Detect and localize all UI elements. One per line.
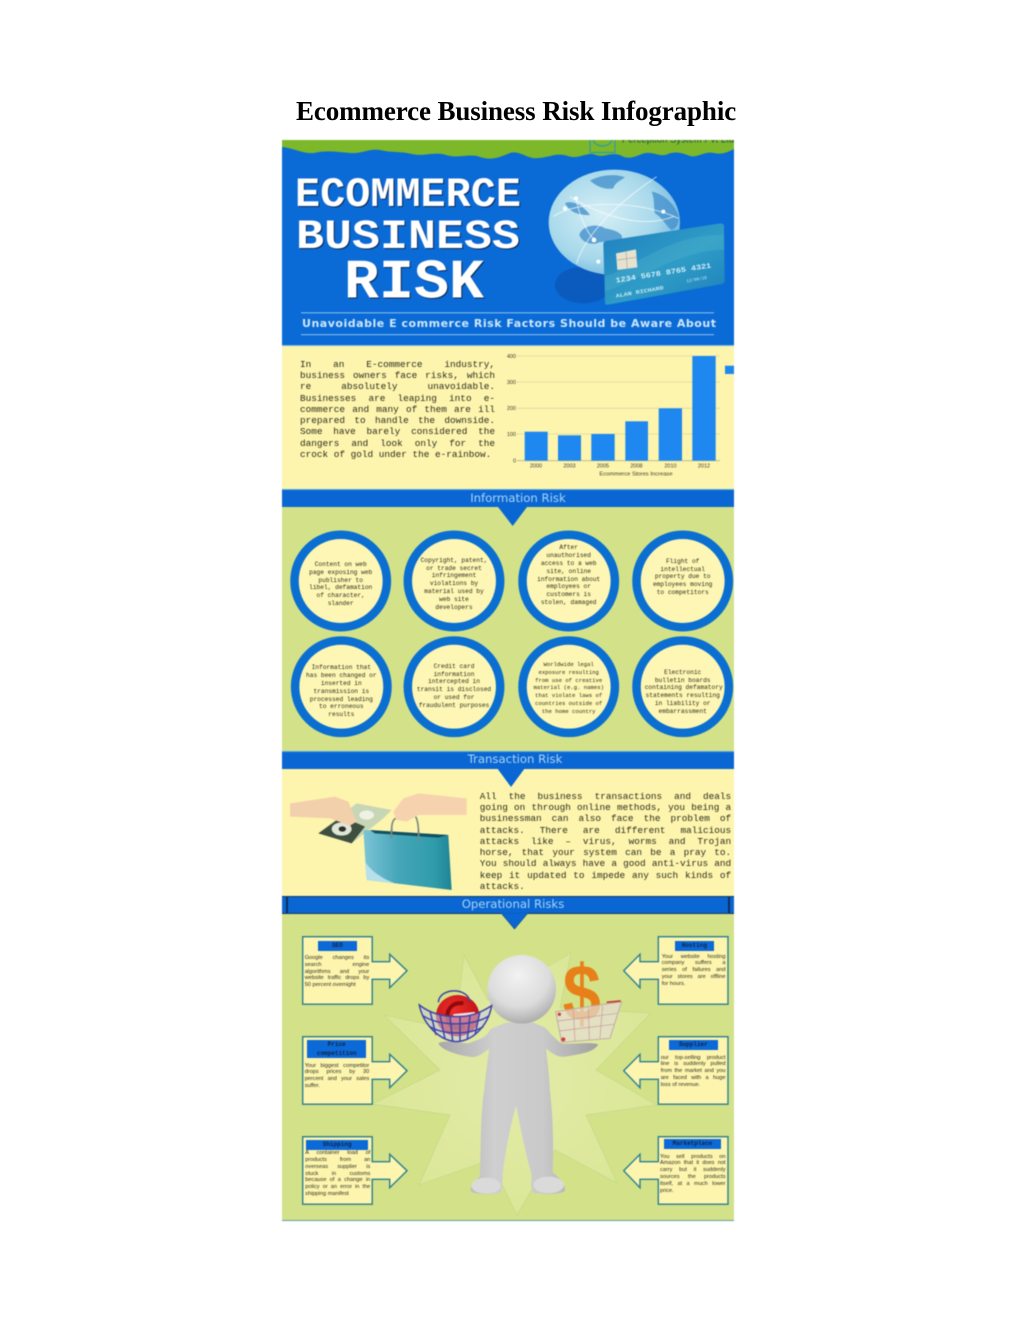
transaction text: attacks. There are different malicious [480, 825, 731, 836]
circle text 8: containing defamatory [645, 684, 723, 691]
panel: operational risks [282, 896, 734, 1221]
bar chart: 300 [507, 380, 516, 386]
intro text [300, 359, 495, 460]
callout: hosting: your stores are offline [662, 974, 725, 980]
panel: header banner [281, 139, 735, 346]
icon: envelope logo [590, 140, 615, 152]
circle text 2: infringement [432, 572, 476, 579]
bar end caps [285, 896, 731, 914]
callout: shipping: policy or an error in the [305, 1184, 370, 1190]
callout: supplier: Supplier [679, 1041, 708, 1048]
circle text 5: has been changed or [306, 672, 377, 679]
callout: price competition: competition [317, 1050, 356, 1057]
panel: information risk [282, 489, 734, 751]
icon: credit card: ALAN RICHARD [615, 285, 664, 300]
circle text 5: to erroneous [319, 703, 364, 710]
circle text 5: transmission is [313, 688, 369, 695]
circle text 7: Worldwide legal [544, 661, 594, 668]
circle text 2: developers [435, 604, 473, 611]
intro text: commerce and many of them are ill [300, 404, 495, 415]
bar chart: 0 [513, 458, 516, 464]
circle text 3: After [559, 544, 578, 551]
callout: price competition: Your biggest competitor [305, 1063, 369, 1069]
circle text 3: employees or [546, 583, 591, 590]
section bar: transaction risk [282, 751, 734, 769]
circle text 1: of character, [317, 592, 365, 599]
callout: price competition [301, 1035, 408, 1106]
icon: basket with red ball [419, 991, 492, 1042]
callout: shipping: overseas supplier is [305, 1164, 370, 1170]
bar chart: 100 [507, 432, 516, 438]
circle text 2: or trade secret [426, 565, 482, 572]
callout: price competition: Price [328, 1041, 346, 1048]
callout: SEO: website traffic drops by [305, 975, 369, 981]
circle text 6: intercepted in [428, 678, 480, 685]
intro text: Some have barely considered the [300, 426, 495, 437]
circle text 1 [308, 560, 373, 607]
circle text 7: countries outside of [535, 700, 602, 707]
callout: hosting: company suffers a [662, 960, 725, 966]
circle text 7: that violate laws of [535, 692, 602, 699]
section bar: transaction risk: Transaction Risk [468, 752, 562, 766]
circle text 8: in liability or [655, 700, 711, 707]
green wavy top [282, 140, 734, 159]
circle text 3: site, online [546, 568, 591, 575]
circle text 4 [652, 558, 713, 596]
circle text 7: from use of creative [535, 677, 602, 684]
arrow: section pointer [497, 768, 525, 788]
bar chart: 400 [507, 354, 516, 360]
callout: price competition: drops prices by 30 [305, 1069, 369, 1075]
bar chart: 2012 [698, 464, 710, 470]
circle text 4: property due to [655, 573, 711, 580]
circle text 5: processed leading [310, 696, 373, 703]
callout: marketplace: You sell products on [660, 1154, 726, 1160]
callout: supplier: line is suddenly pulled [661, 1061, 725, 1067]
bar chart [506, 353, 735, 478]
icon: globe [549, 170, 680, 303]
intro text: In an E-commerce industry, [300, 359, 495, 370]
transaction text: horse, that your system can be a pray to. [480, 847, 731, 858]
intro text: dangers and look only for the [300, 438, 495, 449]
bar chart: Ecommerce Stores Increase [599, 472, 673, 478]
panel: introduction [282, 345, 734, 489]
circle text 7 [533, 661, 604, 715]
circle text 4: Flight of [666, 558, 699, 565]
callout: marketplace: Marketplace [673, 1140, 712, 1147]
intro text: re absolutely unavoidable. [300, 381, 495, 392]
icon: credit card: 12/06/16 [686, 276, 708, 284]
transaction text [479, 791, 732, 892]
transaction text: You should always have a good anti-virus and [480, 858, 731, 869]
callout: SEO: algorithms and your [305, 969, 369, 975]
intro text: business owners face risks, which [300, 370, 495, 381]
callout: supplier: loss of revenue. [661, 1082, 700, 1088]
transaction text: All the business transactions and deals [480, 791, 731, 802]
section bar: operational risks: Operational Risks [462, 897, 564, 911]
intro text: crock of gold under the e-rainbow. [300, 449, 491, 460]
callout: shipping [301, 1135, 408, 1206]
circle text 2: web site [439, 596, 469, 603]
circle text 1: slander [328, 600, 354, 607]
icon: dollar sign in cart [556, 949, 622, 1042]
callout: shipping: Shipping [323, 1141, 352, 1148]
circle text 2: material used by [424, 588, 484, 595]
circle text 4: to competitors [657, 589, 709, 596]
callout: shipping: stuck in customs [305, 1171, 370, 1177]
circle text 7: exposure resulting [538, 669, 599, 676]
figure [438, 955, 598, 1194]
bar chart: 2008 [630, 464, 643, 470]
callout: SEO: SEO [332, 942, 343, 949]
circle text 3: access to a web [541, 560, 597, 567]
icon: dollar sign in cart: $ [563, 949, 601, 1038]
circle text 3: customers is [546, 591, 591, 598]
circle text 5: inserted in [321, 680, 362, 687]
circle text 4: employees moving [653, 581, 712, 588]
circle text 1: Content on web [315, 561, 367, 568]
callout: hosting: Hosting [682, 942, 707, 949]
callout: shipping: A container load of [305, 1150, 370, 1156]
infographic [281, 139, 735, 1222]
headline: RISK [344, 250, 484, 314]
circle text 3 [537, 544, 600, 606]
callout: marketplace: price. [660, 1188, 674, 1194]
circle text 6 [417, 662, 492, 709]
callout: shipping: products from an [305, 1157, 370, 1163]
illustration: hands, money and shopping bag [290, 793, 467, 891]
transaction text: attacks like – virus, worms and Trojan [480, 836, 731, 847]
intro text: Businesses are leaping into e- [300, 393, 495, 404]
transaction text: attacks. [480, 881, 525, 892]
callout: shipping: because of a change in [305, 1177, 370, 1183]
section bar: information risk: Information Risk [470, 491, 566, 505]
circle text 2: violations by [430, 580, 478, 587]
circle text 6: information [434, 671, 474, 678]
callout: SEO: Google changes its [305, 955, 369, 961]
circles [290, 530, 734, 738]
circle text 8 [644, 668, 723, 715]
title: Ecommerce Business Risk Infographic [296, 96, 736, 126]
bar chart: 2003 [563, 464, 576, 470]
transaction text: going on through online methods, you being a [480, 802, 731, 813]
circle text 3: information about [537, 576, 600, 583]
circle text 8: statements resulting [646, 692, 720, 699]
starburst [372, 953, 657, 1215]
callout: marketplace: sources the products [660, 1174, 726, 1180]
callout: hosting [622, 935, 730, 1006]
callout: price competition: suffer. [305, 1083, 320, 1089]
circle text 1: libel, defamation [309, 584, 372, 591]
callout: hosting: Your website hosting [662, 954, 725, 960]
circle text 5: Information that [312, 664, 371, 671]
circle text 2: Copyright, patent, [421, 557, 487, 564]
circle text 6: Credit card [434, 663, 474, 670]
bar chart: 2005 [597, 464, 609, 470]
callout: hosting: series of failures and [662, 967, 725, 973]
bar chart: 2010 [664, 464, 677, 470]
circle text 8: Electronic [664, 669, 701, 676]
circle text 6: fraudulent purposes [419, 702, 489, 709]
callout: SEO [301, 935, 408, 1006]
transaction text: businessman can also face the problem of [480, 813, 731, 824]
subtitle: Unavoidable E commerce Risk Factors Should be Aware About [302, 317, 716, 330]
circle text 5 [306, 664, 377, 718]
circle text 7: material (e.g. names) [533, 684, 604, 691]
callout: price competition: percent and your sales [305, 1076, 369, 1082]
headline: BUSINESS [296, 213, 520, 261]
callout: shipping: shipping manifest [305, 1191, 349, 1197]
subtitle [301, 313, 716, 335]
bar chart: 200 [507, 406, 516, 412]
circle text 1: page exposing web [309, 569, 372, 576]
callout: SEO: 50 percent overnight [305, 982, 356, 988]
circle text 6: or used for [434, 694, 474, 701]
section bar: operational risks [282, 896, 734, 914]
bar chart: 2000 [530, 464, 542, 470]
circle text 5: results [328, 711, 354, 718]
icon: credit card [603, 223, 725, 305]
callout: marketplace: Amazon that it does not [660, 1160, 726, 1166]
intro text: prepared to handle the downside. [300, 415, 495, 426]
circle text 4: intellectual [660, 566, 705, 573]
section bar: information risk [282, 489, 734, 507]
circle text 2 [420, 556, 487, 611]
callout: marketplace [622, 1135, 730, 1206]
headline [295, 171, 521, 314]
headline: ECOMMERCE [295, 171, 521, 219]
callout: supplier: our top-selling product [661, 1055, 725, 1061]
circle text 1: publisher to [318, 577, 363, 584]
callout: marketplace: itself, at a much lower [660, 1181, 726, 1187]
callout: SEO: search engine [305, 962, 369, 968]
circle text 7: the home country [542, 708, 596, 715]
circle text 3: stolen, damaged [541, 599, 597, 606]
callout: supplier: are faced with a huge [661, 1075, 725, 1081]
circle text 6: transit is disclosed [417, 686, 491, 693]
circle text 8: embarrassment [659, 708, 707, 715]
callout: marketplace: carry but it suddenly [660, 1167, 726, 1173]
transaction text: keep it updated to impede any such kinds of [480, 870, 731, 881]
icon: credit card: 1234 5678 8765 4321 [615, 262, 713, 286]
arrow: section pointer [498, 506, 528, 526]
callout: hosting: for hours. [662, 981, 685, 987]
panel: transaction risk [282, 751, 734, 896]
background star and figure [374, 949, 656, 1214]
circle text 3: unauthorised [546, 552, 591, 559]
callout: supplier: from the market and you [661, 1068, 725, 1074]
callout: supplier [622, 1035, 730, 1106]
arrow: section pointer [501, 912, 528, 930]
circle text 8: bulletin boards [655, 677, 711, 684]
